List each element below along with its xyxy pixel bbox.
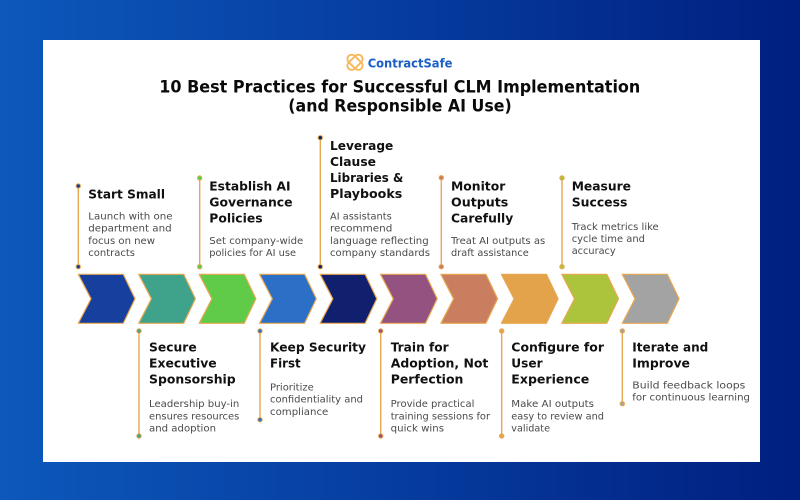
connector 8 [500, 329, 504, 438]
description 10 [632, 381, 750, 404]
description 6: training sessions for [391, 411, 491, 422]
description 4: confidentiality and [270, 395, 363, 406]
description 2: ensures resources [149, 411, 239, 422]
heading 4 [270, 340, 367, 371]
heading 8: Experience [511, 372, 590, 387]
description 6: Provide practical [391, 399, 474, 410]
description 6: quick wins [391, 423, 444, 434]
description 4: compliance [270, 407, 328, 418]
heading 2: Secure [149, 340, 197, 355]
white panel [43, 40, 760, 462]
description 5: language reflecting [330, 236, 429, 247]
heading 7: Monitor [451, 180, 506, 195]
connector 6 [378, 329, 383, 438]
heading 3: Governance [209, 196, 293, 211]
description 7: Treat AI outputs as [450, 236, 545, 247]
step 8: Configure for User Experience [500, 329, 605, 438]
chevron 1 [78, 274, 135, 323]
heading 3: Establish AI [209, 180, 291, 195]
connector 2 [137, 329, 141, 438]
heading 9: Success [572, 196, 628, 211]
heading 7: Carefully [451, 212, 514, 227]
title: 10 Best Practices for Successful CLM Implementation [159, 78, 640, 97]
description 2 [149, 399, 239, 434]
description 3 [209, 236, 303, 259]
heading 10 [632, 340, 708, 371]
chevron 6 [380, 274, 437, 323]
description 3: policies for AI use [209, 248, 296, 259]
description 7 [450, 236, 545, 259]
heading 7 [451, 180, 514, 227]
description 3: Set company-wide [209, 236, 303, 247]
description 1: Launch with one [88, 211, 173, 222]
heading 8: User [511, 356, 543, 371]
heading 10: Iterate and [632, 340, 708, 355]
heading 1: Start Small [88, 187, 165, 202]
description 10: for continuous learning [632, 393, 750, 404]
connector 10 [620, 329, 624, 406]
step 4: Keep Security First [258, 329, 367, 422]
heading 2: Executive [149, 356, 217, 371]
heading 6: Perfection [391, 372, 463, 387]
heading 2: Sponsorship [149, 372, 236, 387]
description 5: company standards [330, 248, 430, 259]
connector 5 [318, 136, 322, 269]
heading 2 [149, 340, 236, 387]
description 1: focus on new [88, 236, 155, 247]
chevron 10 [622, 274, 679, 323]
description 5: AI assistants [330, 211, 392, 222]
description 5: recommend [330, 224, 392, 235]
step 10: Iterate and Improve [620, 329, 750, 406]
heading 10: Improve [632, 356, 690, 371]
description 7: draft assistance [451, 248, 529, 259]
description 2: and adoption [149, 423, 216, 434]
description 8: easy to review and [511, 411, 604, 422]
heading 6: Adoption, Not [391, 356, 488, 371]
step 6: Train for Adoption, Not Perfection [378, 329, 491, 438]
heading 5: Clause [330, 155, 376, 170]
step 1: Start Small [76, 184, 173, 269]
description 6 [391, 399, 491, 434]
heading 4: First [270, 356, 301, 371]
step 5: Leverage Clause Libraries & Playbooks [318, 136, 430, 269]
chevron 8 [501, 274, 558, 323]
heading 6: Train for [391, 340, 449, 355]
description 10: Build feedback loops [632, 381, 745, 392]
heading 7: Outputs [451, 196, 509, 211]
connector 3 [198, 176, 202, 269]
connector 9 [560, 176, 564, 269]
description 9: cycle time and [572, 234, 645, 245]
chevron 4 [260, 274, 316, 323]
heading 9 [572, 180, 631, 211]
description 5 [330, 211, 430, 259]
title [159, 78, 640, 116]
description 8: validate [511, 423, 550, 434]
heading 3 [209, 180, 293, 227]
heading 5: Leverage [330, 139, 394, 154]
heading 6 [391, 340, 488, 387]
description 4: Prioritize [270, 383, 314, 394]
heading 5: Libraries & [330, 171, 403, 186]
heading 8: Configure for [511, 340, 605, 355]
description 8 [511, 399, 604, 434]
chevron process row [78, 274, 679, 323]
chevron 2 [139, 274, 195, 323]
description 9: accuracy [572, 246, 616, 257]
description 4 [270, 383, 363, 418]
step 3: Establish AI Governance Policies [198, 176, 303, 269]
chevron 5 [320, 274, 377, 323]
description 1: contracts [88, 248, 135, 259]
connector 7 [439, 176, 443, 269]
description 1 [88, 211, 173, 259]
logo wordmark: ContractSafe [368, 56, 452, 71]
description 2: Leadership buy-in [149, 399, 239, 410]
description 8: Make AI outputs [511, 399, 594, 410]
heading 3: Policies [209, 212, 263, 227]
heading 5 [330, 139, 403, 202]
description 9: Track metrics like [571, 222, 659, 233]
heading 5: Playbooks [330, 187, 403, 202]
chevron 9 [562, 274, 618, 323]
description 1: department and [88, 224, 172, 235]
icon: logo mark [346, 53, 364, 72]
step 2: Secure Executive Sponsorship [137, 329, 239, 438]
heading 9: Measure [572, 180, 631, 195]
description 9 [571, 222, 659, 257]
title: (and Responsible AI Use) [288, 97, 512, 116]
step 9: Measure Success [560, 176, 659, 269]
chevron 7 [441, 274, 498, 323]
heading 4: Keep Security [270, 340, 367, 355]
connector 4 [258, 329, 262, 422]
heading 8 [511, 340, 605, 387]
step 7: Monitor Outputs Carefully [439, 176, 545, 269]
chevron 3 [199, 274, 256, 323]
logo [346, 53, 452, 72]
connector 1 [76, 184, 81, 269]
